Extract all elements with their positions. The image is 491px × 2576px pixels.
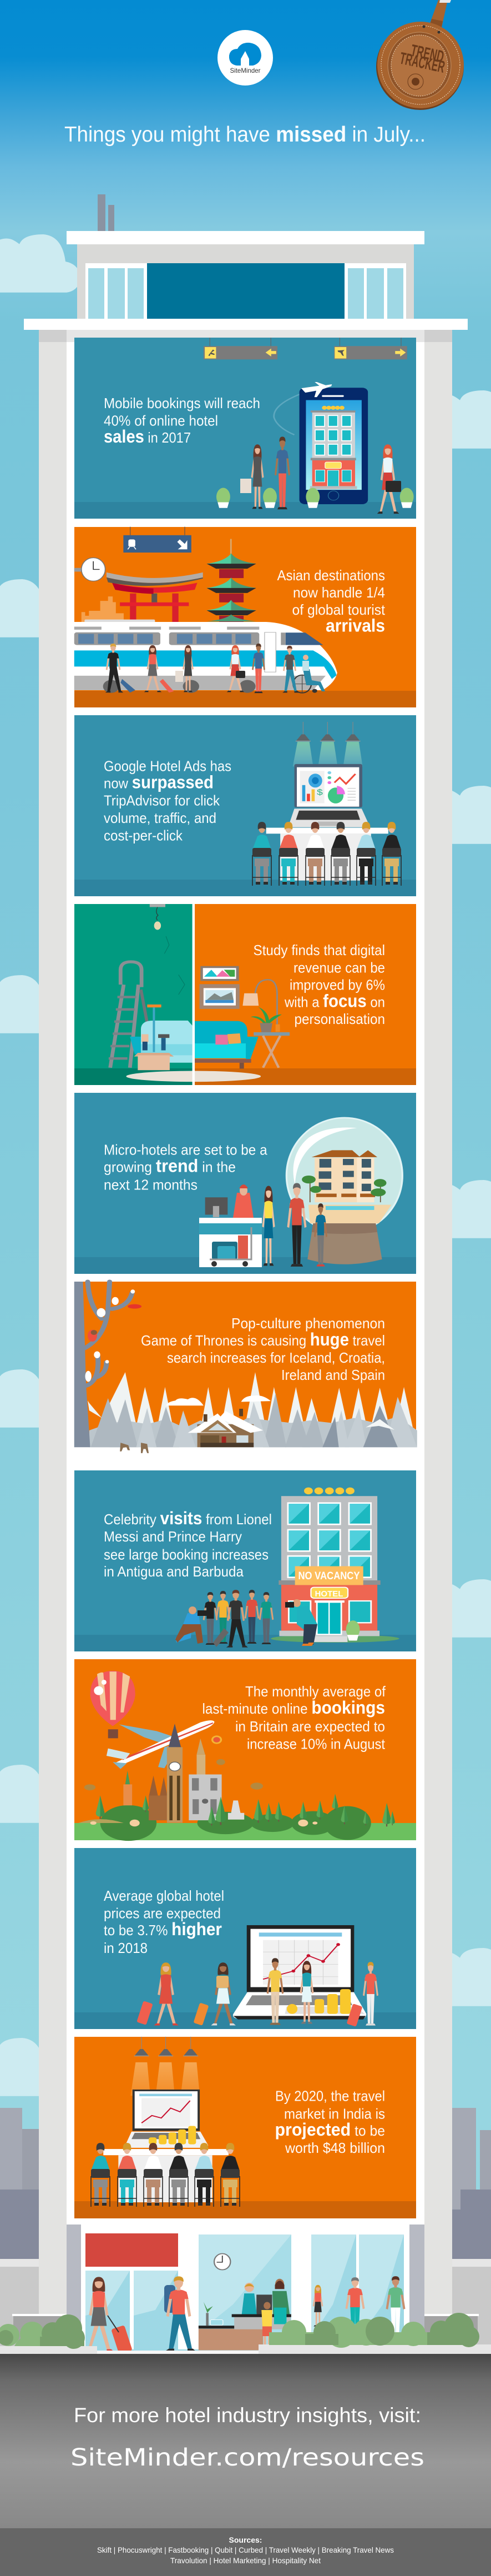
- text: last-minute bookings: in Britain are expected to: [235, 1718, 385, 1735]
- text: last-minute bookings: [202, 1683, 386, 1753]
- travellers with suitcases: [136, 1958, 378, 2027]
- text: global hotel prices: Average global hotel: [104, 1887, 224, 1904]
- text: personalisation: Study finds that digital: [253, 942, 385, 958]
- panel: global hotel prices: [74, 1848, 416, 2029]
- seated audience: [252, 822, 401, 886]
- logo: SiteMinder: [217, 30, 273, 86]
- link: SiteMinder resources: SiteMinder.com/resources: [70, 2444, 424, 2472]
- text: personalisation: [253, 942, 385, 1027]
- text: India travel market: market in India is: [284, 2106, 385, 2122]
- text: Asian destinations: now handle 1/4: [293, 584, 385, 601]
- text: last-minute bookings: increase 10% in August: [247, 1736, 386, 1753]
- text: last-minute bookings: last-minute online bookings: [202, 1698, 385, 1718]
- text labels on hotel: [298, 1570, 360, 1599]
- plinths beside the tower: [12, 2314, 479, 2341]
- ground strips: [0, 2344, 491, 2354]
- badge: Trend Tracker leather tag: [376, 0, 464, 110]
- glass windows: [85, 2234, 404, 2351]
- sources footer: Travolution | Hotel Marketing | Hospitality Net: [170, 2556, 321, 2565]
- seated audience: [91, 2143, 240, 2207]
- title: Things you might have missed in July...: [64, 123, 426, 147]
- text: more insights: For more hotel industry insights, visit:: [74, 2404, 421, 2427]
- text: celebrity visits: see large booking increases: [104, 1546, 269, 1563]
- panel: Google Hotel Ads: [74, 715, 416, 896]
- text: personalisation: personalisation: [294, 1011, 385, 1027]
- travellers with phones: [240, 436, 401, 514]
- text: Google Hotel Ads: [104, 757, 231, 843]
- logo: SiteMinder: SiteMinder: [230, 67, 261, 74]
- hotel with no vacancy sign: [271, 1488, 399, 1643]
- text: Asian destinations: [277, 567, 386, 635]
- text: Game of Thrones: Pop-culture phenomenon: [231, 1315, 385, 1332]
- footer call to action: [0, 2354, 491, 2528]
- text: mobile bookings: sales in 2017: [104, 426, 191, 446]
- text: Game of Thrones: Ireland and Spain: [281, 1367, 385, 1383]
- laptop price chart with coins: [233, 1925, 366, 2020]
- tower body: [24, 319, 468, 2314]
- panel: Game of Thrones: [74, 1282, 417, 1453]
- text: global hotel prices: prices are expected: [104, 1905, 221, 1921]
- text: micro-hotels: [104, 1142, 267, 1193]
- text: Google Hotel Ads: TripAdvisor for click: [104, 792, 220, 809]
- background city buildings: [0, 2108, 491, 2347]
- paparazzi and celebrity: [175, 1590, 317, 1648]
- lobby guests: [313, 2276, 405, 2338]
- text: Google Hotel Ads: now surpassed: [104, 772, 214, 792]
- text: India travel market: projected to be: [275, 2120, 385, 2140]
- text: Game of Thrones: search increases for Iceland, Croatia,: [167, 1349, 385, 1366]
- text: last-minute bookings: The monthly average of: [245, 1683, 386, 1700]
- text: celebrity visits: in Antigua and Barbuda: [104, 1563, 244, 1580]
- laptop dashboard with pendant lamps: [266, 722, 388, 881]
- snow globe and reception desk: [205, 1118, 402, 1264]
- receptionist behind desk: [199, 1184, 262, 1267]
- sources footer: Skift | Phocuswright | Fastbooking | Qubit | Curbed | Travel Weekly | Breaking Travel News: [97, 2545, 394, 2554]
- laptop chart with lamps: [103, 2037, 229, 2202]
- text: mobile bookings: [104, 395, 260, 446]
- text: mobile bookings: 40% of online hotel: [104, 412, 218, 429]
- laptop dashboard with pendant lamps: $: [317, 787, 323, 797]
- clouds: [0, 234, 491, 2096]
- text: Asian destinations: of global tourist: [292, 601, 386, 618]
- text: celebrity visits: [104, 1508, 272, 1580]
- walkers entering: [84, 2276, 195, 2355]
- room renovation illustration: [109, 904, 290, 1085]
- text labels on hotel: HOTEL: [315, 1589, 343, 1599]
- text: micro-hotels: next 12 months: [104, 1176, 198, 1193]
- text: Asian destinations: Asian destinations: [277, 567, 385, 584]
- badge: Trend Tracker leather tag: TRACKER: [398, 49, 447, 77]
- text: mobile bookings: Mobile bookings will reach: [104, 395, 260, 411]
- text: Game of Thrones: Game of Thrones is causing huge travel: [141, 1329, 385, 1349]
- rooftop of hotel: [67, 194, 424, 319]
- sources footer: [0, 2528, 491, 2576]
- text: India travel market: By 2020, the travel: [275, 2088, 385, 2105]
- text: micro-hotels: growing trend in the: [104, 1156, 236, 1176]
- text: Google Hotel Ads: volume, traffic, and: [104, 810, 216, 826]
- panel: mobile bookings: [74, 338, 416, 519]
- text labels on hotel: NO VACANCY: [298, 1570, 360, 1582]
- text: India travel market: [275, 2088, 385, 2156]
- text: global hotel prices: to be 3.7% higher: [104, 1919, 222, 1939]
- ground floor lobby: [0, 2225, 491, 2355]
- family at check-in: [262, 1183, 327, 1267]
- panel: micro-hotels: [74, 1093, 416, 1274]
- text: Game of Thrones: [141, 1315, 385, 1383]
- passengers on platform: [105, 644, 325, 693]
- red sign panel: [85, 2233, 178, 2267]
- panel: last-minute bookings: [74, 1659, 416, 1841]
- balloon, plane and landmarks: [78, 1671, 395, 1841]
- hedges: [0, 2313, 479, 2349]
- panel: India travel market: [74, 2037, 416, 2218]
- text: Asian destinations: arrivals: [326, 615, 385, 635]
- text: celebrity visits: Celebrity visits from Lionel: [104, 1508, 272, 1528]
- text: global hotel prices: in 2018: [104, 1940, 148, 1956]
- reception desk: [199, 2254, 291, 2351]
- text: Google Hotel Ads: Google Hotel Ads has: [104, 757, 231, 774]
- text: celebrity visits: Messi and Prince Harry: [104, 1528, 242, 1545]
- badge: Trend Tracker leather tag: TREND: [409, 42, 446, 66]
- panel: personalisation before and after room: [74, 904, 416, 1085]
- text: micro-hotels: Micro-hotels are set to be a: [104, 1142, 267, 1158]
- text: global hotel prices: [104, 1887, 224, 1956]
- text: personalisation: improved by 6%: [290, 977, 385, 993]
- panel: celebrity visits: [74, 1470, 416, 1651]
- snowy forest with cabin and tree: [74, 1282, 417, 1453]
- text: personalisation: revenue can be: [293, 959, 385, 976]
- text: personalisation: with a focus on: [284, 991, 385, 1011]
- text: India travel market: worth $48 billion: [285, 2140, 385, 2156]
- sources footer: Sources:: [229, 2535, 262, 2544]
- panel: Asian destinations: [74, 527, 416, 707]
- text: Google Hotel Ads: cost-per-click: [104, 827, 183, 843]
- Asian station illustration: torii, pagoda and train: [74, 527, 337, 693]
- airport signs and hotel phone illustration: [204, 338, 414, 508]
